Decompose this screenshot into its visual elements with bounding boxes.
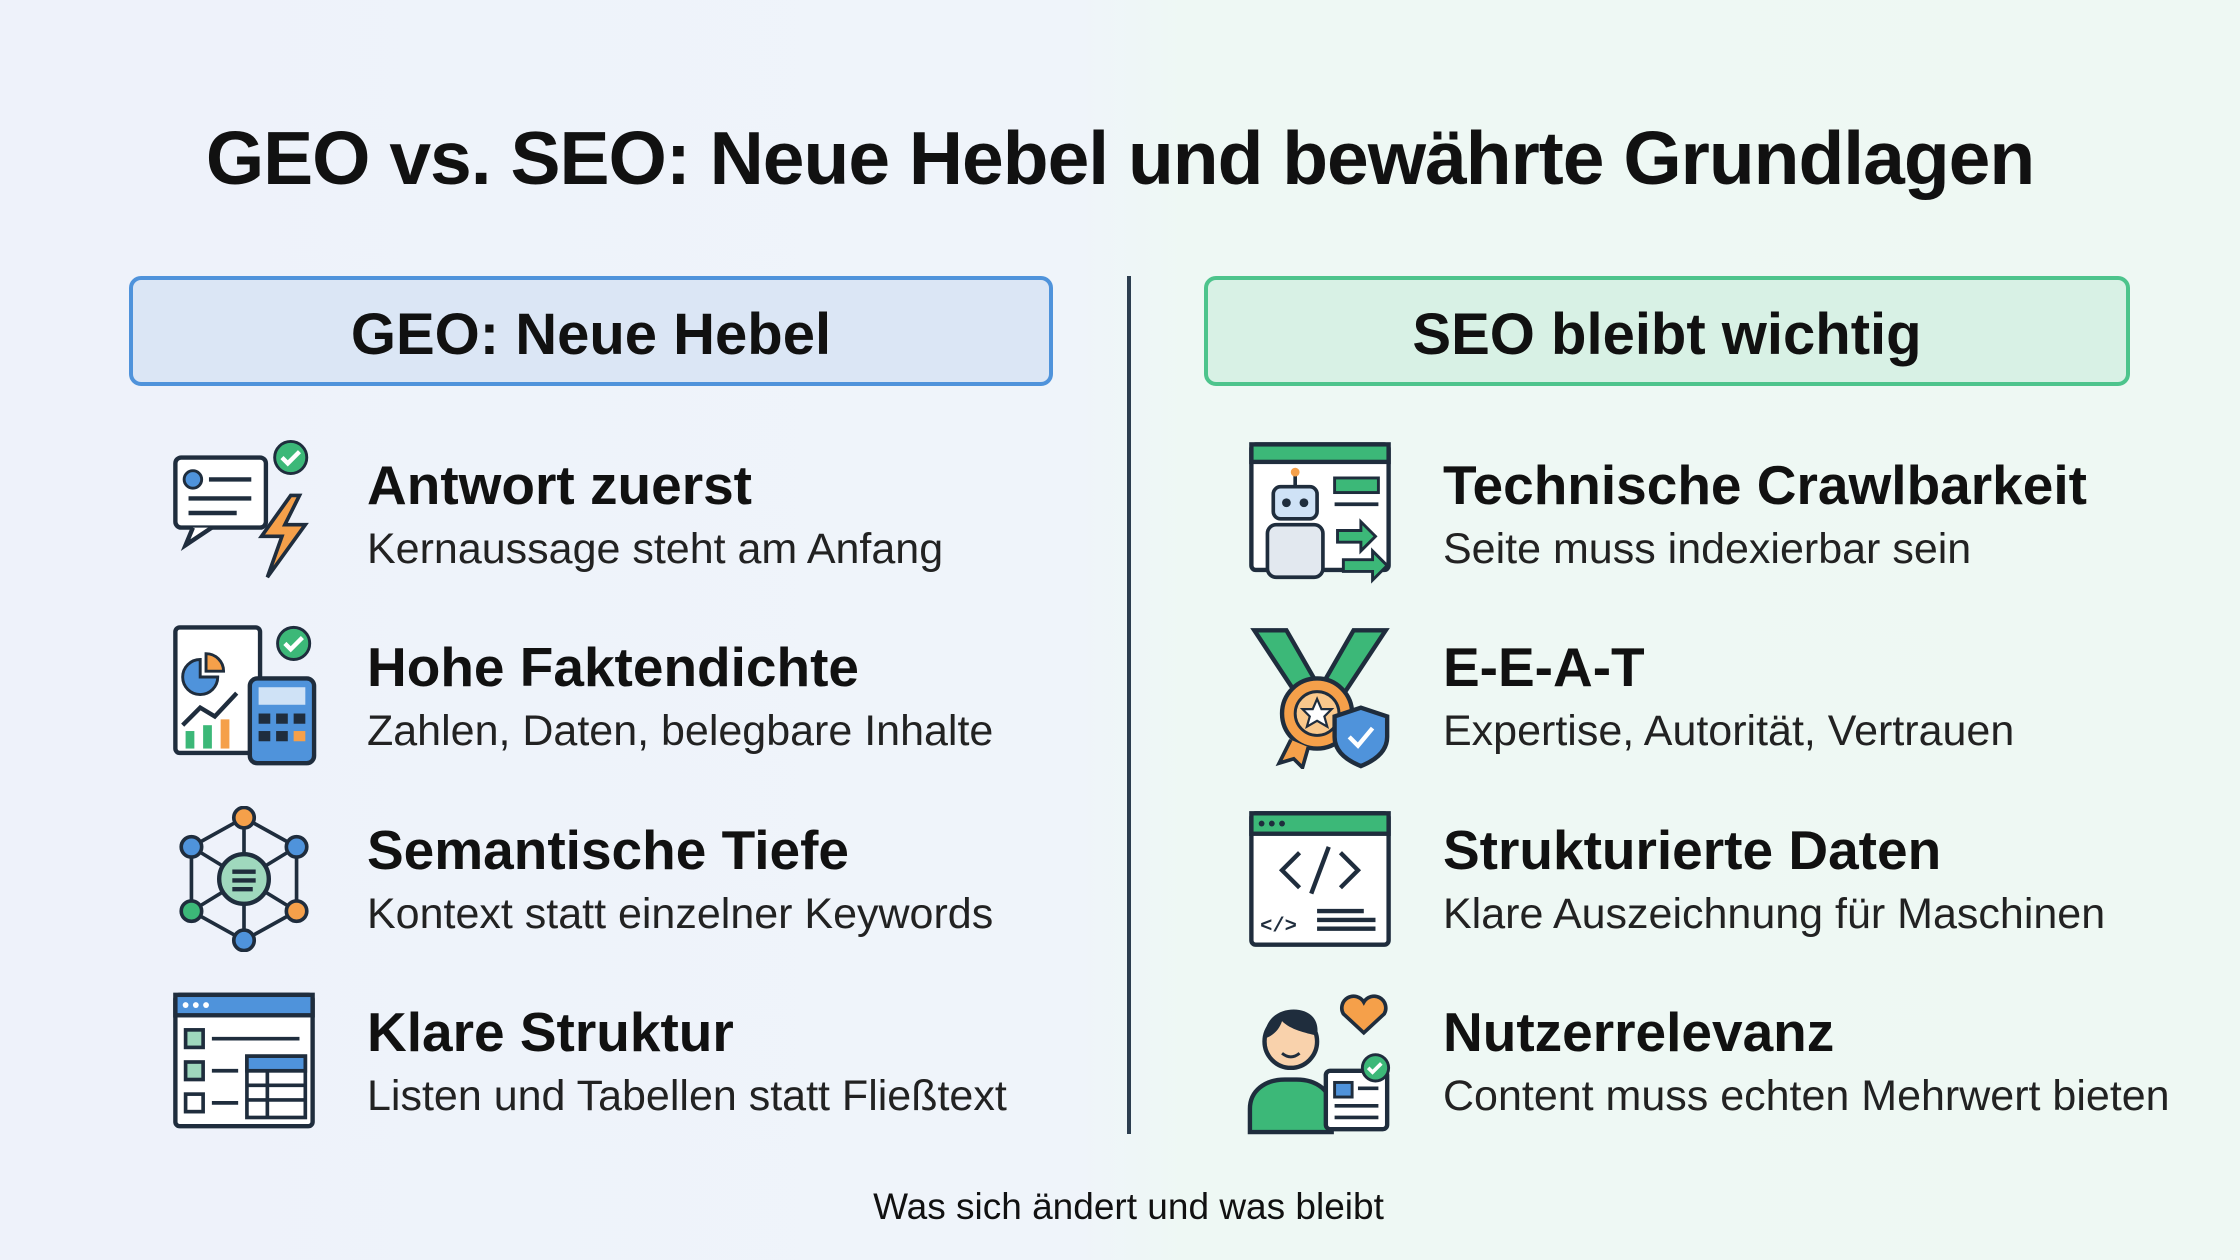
title: GEO vs. SEO: Neue Hebel und bewährte Grundlagen xyxy=(206,116,2034,200)
item: Nutzerrelevanz: Content muss echten Mehrwert bieten xyxy=(1443,1072,2170,1120)
divider xyxy=(1127,276,1131,1134)
item: Technische Crawlbarkeit: Seite muss indexierbar sein xyxy=(1443,525,1971,573)
item: Strukturierte Daten: Klare Auszeichnung für Maschinen xyxy=(1443,890,2105,938)
item: Nutzerrelevanz xyxy=(1443,1001,2170,1120)
item: Klare Struktur xyxy=(367,1001,1007,1120)
item: E-E-A-T xyxy=(1443,636,2014,755)
header: SEO xyxy=(1204,276,2130,386)
item: Hohe Faktendichte: Hohe Faktendichte xyxy=(367,636,859,698)
icon: user relevance xyxy=(1248,994,1390,1134)
icon: structure xyxy=(173,992,315,1128)
item: Technische Crawlbarkeit xyxy=(1443,454,2087,573)
item: Technische Crawlbarkeit: Technische Crawlbarkeit xyxy=(1443,454,2087,516)
icon: medal shield xyxy=(1250,628,1390,769)
icon: facts xyxy=(173,625,316,766)
header: SEO: SEO bleibt wichtig xyxy=(1412,302,1922,367)
item: Hohe Faktendichte: Zahlen, Daten, belegbare Inhalte xyxy=(367,707,993,755)
icon: code xyxy=(1249,811,1391,947)
item: Klare Struktur: Klare Struktur xyxy=(367,1001,734,1063)
icon: semantic network xyxy=(179,806,309,952)
item: Antwort zuerst: Antwort zuerst xyxy=(367,454,752,516)
item: Strukturierte Daten: Strukturierte Daten xyxy=(1443,819,1941,881)
item: Nutzerrelevanz: Nutzerrelevanz xyxy=(1443,1001,1834,1063)
icon: answer first xyxy=(173,440,309,578)
item: E-E-A-T: Expertise, Autorität, Vertrauen xyxy=(1443,707,2014,755)
item: Antwort zuerst xyxy=(367,454,943,573)
header: GEO xyxy=(129,276,1053,386)
item: E-E-A-T: E-E-A-T xyxy=(1443,636,1645,698)
item: Semantische Tiefe: Semantische Tiefe xyxy=(367,819,849,881)
item: Hohe Faktendichte xyxy=(367,636,993,755)
item: Klare Struktur: Listen und Tabellen statt Fließtext xyxy=(367,1072,1007,1120)
item: Semantische Tiefe: Kontext statt einzelner Keywords xyxy=(367,890,993,938)
icon: code: </> xyxy=(1260,916,1297,939)
footer caption: Was sich ändert und was bleibt xyxy=(873,1186,1384,1227)
header: GEO: GEO: Neue Hebel xyxy=(351,302,831,367)
item: Semantische Tiefe xyxy=(367,819,993,938)
item: Strukturierte Daten xyxy=(1443,819,2105,938)
icon: crawler robot xyxy=(1249,442,1391,584)
item: Antwort zuerst: Kernaussage steht am Anfang xyxy=(367,525,943,573)
